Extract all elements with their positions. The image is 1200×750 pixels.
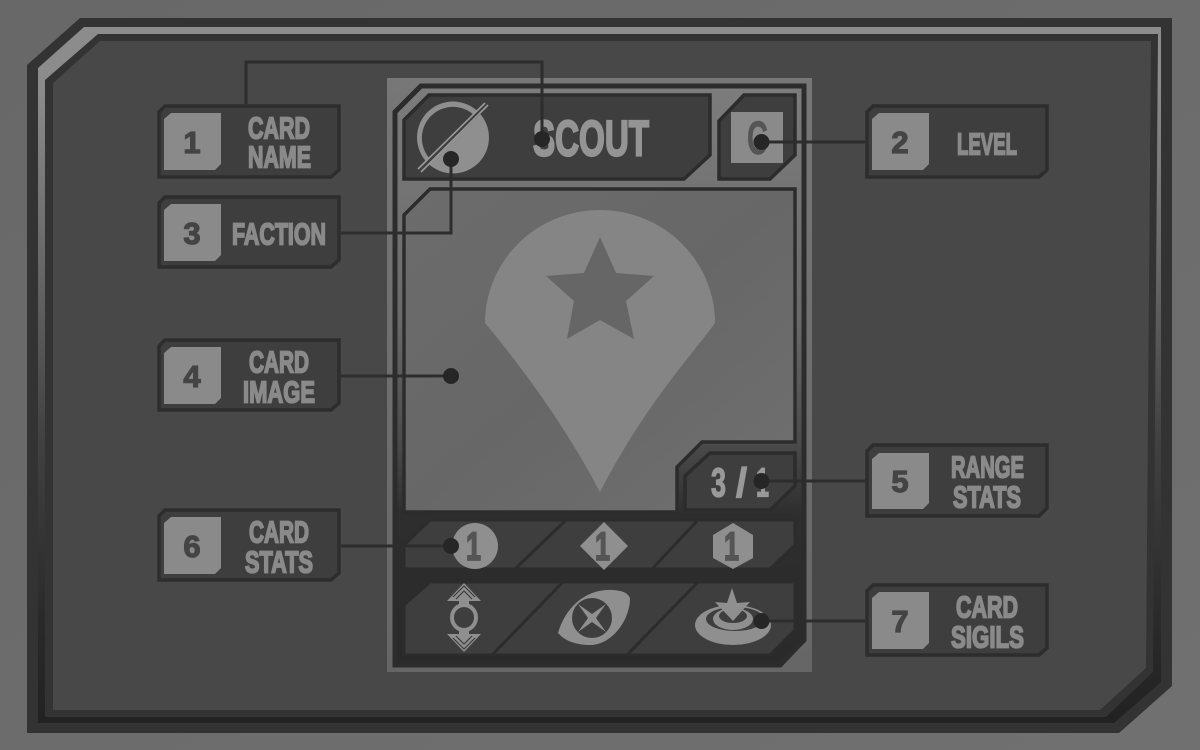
icon: map pin: [485, 210, 715, 492]
callout 4: card image: IMAGE: [243, 374, 315, 410]
icon: eye sigil: [558, 590, 630, 645]
panel: range stats: 1: [756, 460, 769, 506]
callout 1: card name: CARD: [248, 110, 310, 146]
icon: faction: [417, 102, 489, 174]
callout 6: card stats: STATS: [245, 544, 313, 580]
callout 4: card image: 4: [183, 359, 201, 394]
card frame: [395, 86, 804, 665]
connector: card image: [341, 374, 451, 378]
callout 2: level: LEVEL: [957, 126, 1017, 162]
connector: faction: [341, 159, 451, 233]
callout 4: card image: CARD: [249, 344, 309, 380]
panel: level: C: [747, 111, 768, 164]
panel: card name: [404, 95, 710, 179]
connector: card name: [246, 62, 542, 139]
card name text: SCOUT: [533, 110, 649, 166]
connector: card stats: [341, 544, 451, 548]
icon: target arrow sigil: [695, 588, 771, 645]
marker dots: [443, 131, 770, 629]
connector: level: [761, 140, 865, 144]
callout 6: card stats: CARD: [249, 514, 309, 550]
callout 3: faction: FACTION: [232, 216, 326, 252]
panel: card stats: [404, 520, 795, 570]
callout 3: faction: 3: [183, 216, 201, 251]
callout 6: card stats: 6: [183, 529, 201, 564]
connector: range stats: [761, 480, 865, 482]
callout 2: level: 2: [891, 125, 909, 160]
icon: hexagon stat: [713, 523, 753, 569]
icon: star: [546, 237, 654, 339]
callout 5: range stats: STATS: [953, 480, 1021, 514]
card background: [387, 78, 812, 672]
icon: circle stat: 1: [466, 525, 481, 569]
callout 2: level: [867, 106, 1047, 177]
callout 7: card sigils: SIGILS: [951, 620, 1024, 654]
callout 1: card name: 1: [183, 125, 201, 160]
callout 4: card image: [159, 340, 339, 410]
callout 5: range stats: RANGE: [951, 450, 1024, 484]
panel: card image: [404, 189, 795, 512]
callout 3: faction: [159, 197, 339, 267]
panel: level: [719, 95, 795, 179]
icon: diamond stat: [580, 522, 628, 570]
icon: diamond stat: 1: [595, 525, 610, 569]
callout 1: card name: [159, 106, 339, 177]
callout 7: card sigils: 7: [891, 604, 909, 639]
callout 1: card name: NAME: [248, 140, 311, 174]
icon: circle stat: [452, 523, 498, 569]
callout 7: card sigils: CARD: [956, 590, 1018, 624]
icon: double arrow sigil: [447, 583, 481, 652]
panel: range stats: 3: [711, 460, 726, 506]
panel: card sigils: [404, 582, 795, 655]
connector: card sigils: [761, 620, 865, 622]
callout 5: range stats: [867, 445, 1047, 516]
callout 5: range stats: 5: [891, 464, 909, 499]
panel: range stats: [685, 453, 795, 510]
callout 7: card sigils: [867, 585, 1047, 655]
panel: range stats: /: [736, 460, 747, 506]
icon: hexagon stat: 1: [724, 525, 739, 569]
callout 6: card stats: [159, 510, 339, 580]
